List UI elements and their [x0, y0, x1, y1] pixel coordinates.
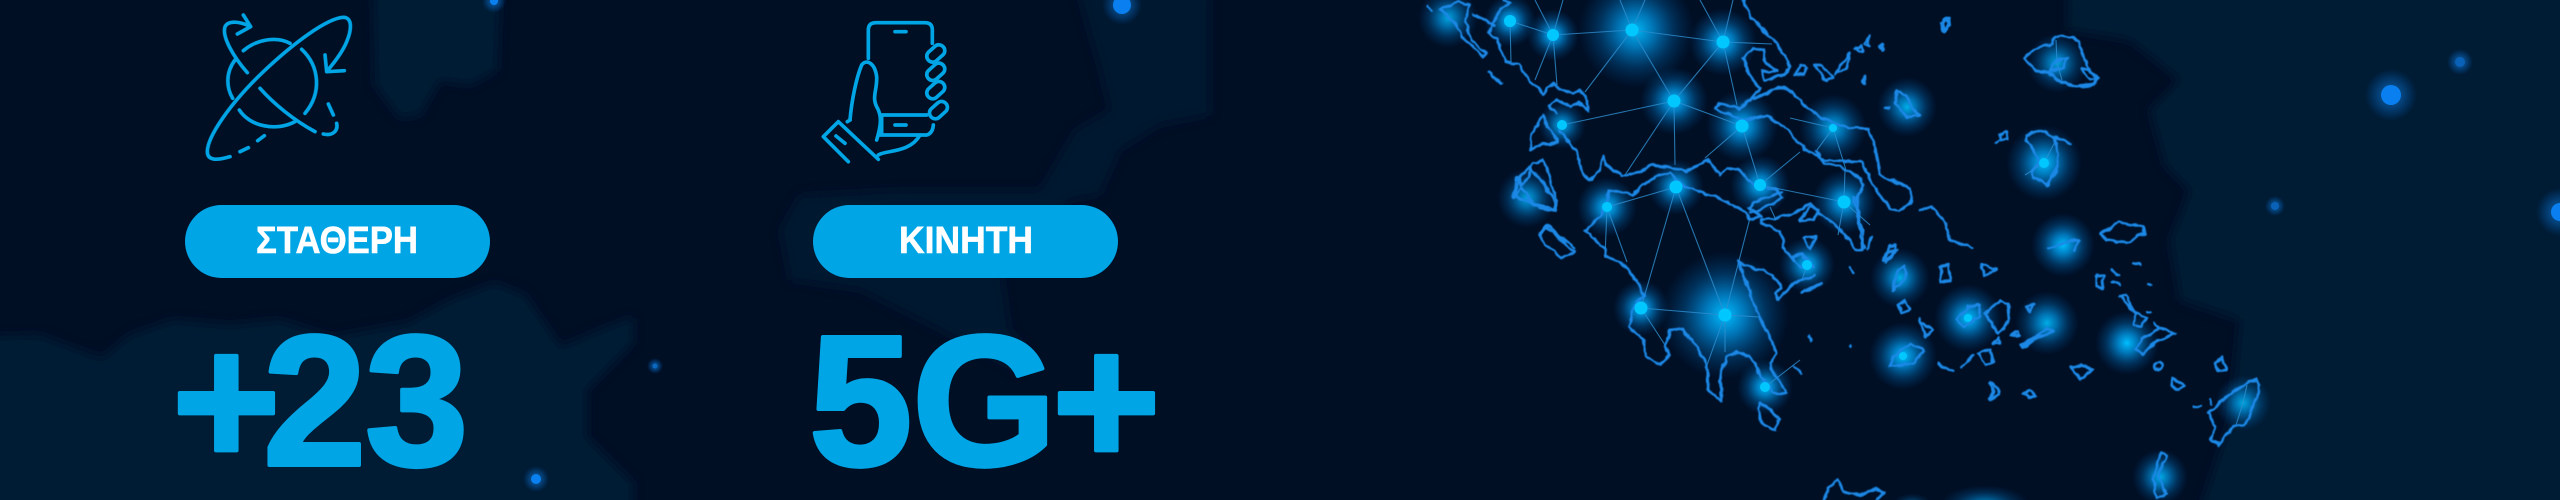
star: top centre — [1102, 0, 1142, 25]
column: mobile network — [809, 23, 1161, 500]
value: 5G+: G — [912, 298, 1057, 500]
pill: mobile label: ΚΙΝΗΤΗ — [899, 220, 1033, 262]
island: Chios — [2027, 131, 2070, 185]
star: faint left — [647, 358, 663, 374]
star: right edge — [2536, 188, 2560, 236]
coastlines: north and central mainland — [1427, 0, 1948, 248]
pill: fixed label: ΣΤΑΘΕΡΗ — [256, 220, 418, 262]
map glow halos — [1418, 0, 2271, 500]
island: Ikaria — [2048, 240, 2080, 250]
island: Evia south — [1920, 207, 1973, 248]
island: Skyros — [1886, 90, 1918, 117]
glowing network nodes — [1504, 15, 2049, 392]
value: +23: 3 — [365, 298, 468, 500]
network connection lines — [1510, 0, 2247, 425]
island: Rhodes — [2208, 378, 2260, 445]
island: Samos — [2100, 222, 2145, 243]
Cyclades and Dodecanese islands — [1885, 250, 2260, 498]
island: Karpathos — [2153, 453, 2167, 498]
value: +23: 2 — [263, 298, 366, 500]
background stars — [482, 0, 2560, 492]
star: right small — [2447, 49, 2473, 75]
star: top left — [482, 0, 506, 13]
star: lower left — [523, 466, 549, 492]
map of Greece — [1418, 0, 2271, 500]
star: right large — [2365, 69, 2417, 121]
island: Lesvos — [2024, 36, 2098, 87]
value: +23: + — [172, 298, 281, 500]
coastlines: Peloponnese and Attica — [1513, 167, 1895, 500]
icon: hand holding phone — [823, 23, 950, 162]
Aegean islands — [1886, 18, 2145, 250]
pill: fixed label — [185, 205, 490, 278]
value: 5G+: 5 — [809, 298, 912, 500]
island: Psara — [1995, 132, 2007, 142]
pill: mobile label — [813, 205, 1118, 278]
icon: globe with orbits — [207, 15, 350, 159]
island: Limnos — [1943, 18, 1949, 31]
column: fixed network — [172, 15, 490, 500]
star: right faint — [2265, 196, 2285, 216]
value: 5G+: + — [1052, 298, 1161, 500]
